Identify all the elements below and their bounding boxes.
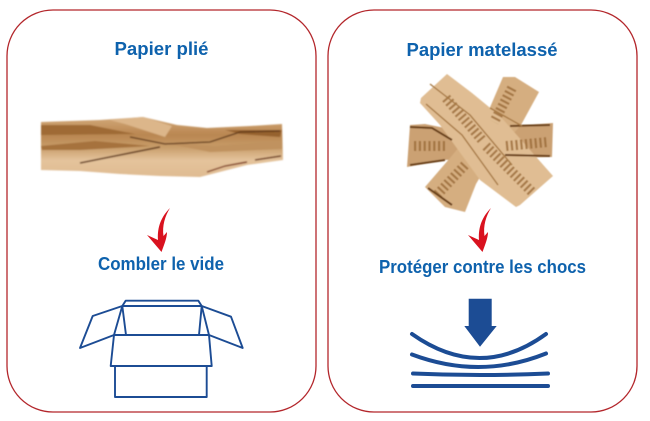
icon: open box xyxy=(80,301,243,397)
icon: pressure arrow on bending layers xyxy=(412,299,548,386)
panel: papier plié xyxy=(7,10,316,412)
heading: papier plié: Papier plié xyxy=(114,39,208,59)
arrow: red curved down xyxy=(147,208,170,252)
heading: papier matelassé: Papier matelassé xyxy=(406,40,558,60)
image: crumpled cushioning paper xyxy=(407,74,553,212)
arrow: red curved down xyxy=(468,208,491,252)
image: folded kraft paper xyxy=(41,117,283,177)
text: protéger contre les chocs: Protéger contre les chocs xyxy=(379,257,586,277)
panel: papier matelassé xyxy=(328,10,637,412)
text: combler le vide: Combler le vide xyxy=(98,254,224,274)
